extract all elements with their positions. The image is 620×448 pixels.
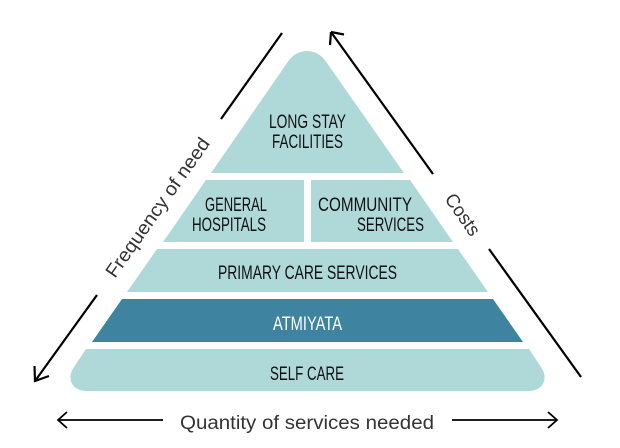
panel: self care: SELF CARE <box>270 363 344 385</box>
arrow: frequency of need <box>34 33 282 381</box>
arrow: costs <box>330 32 581 377</box>
panel: long stay facilities <box>211 51 404 173</box>
panel: general hospitals: GENERAL <box>205 194 267 216</box>
panel: general hospitals <box>163 180 304 242</box>
panel: atmiyata: ATMIYATA <box>273 313 342 335</box>
label: quantity of services needed: Quantity of services needed <box>180 413 434 434</box>
panel: self care <box>70 349 545 391</box>
panel: primary care services: PRIMARY CARE SERVICES <box>218 262 397 284</box>
panel: general hospitals: HOSPITALS <box>192 214 266 236</box>
arrow: quantity of services <box>58 412 557 428</box>
label: frequency of need: Frequency of need <box>102 134 215 282</box>
label: costs: Costs <box>440 190 484 240</box>
panel: long stay facilities: FACILITIES <box>272 131 343 153</box>
panel: primary care services <box>127 249 488 292</box>
panel: community services: SERVICES <box>357 214 424 236</box>
panel: atmiyata <box>92 299 523 342</box>
panel: long stay facilities: LONG STAY <box>269 111 346 133</box>
panel: community services: COMMUNITY <box>318 194 412 216</box>
panel: community services <box>311 180 453 242</box>
